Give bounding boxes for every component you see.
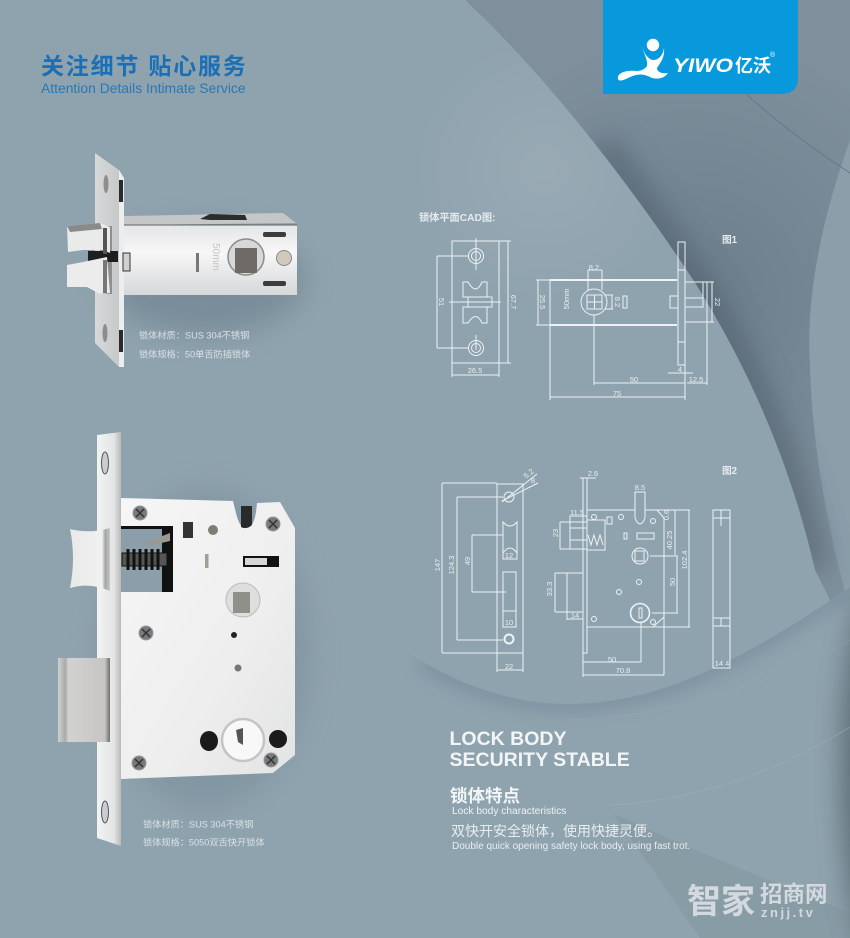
cad drawing 2: mechanism view bbox=[545, 469, 690, 677]
cad drawing 1: side view: 50mm bbox=[562, 289, 571, 309]
feature description: 双快开安全锁体，使用快捷灵便。 bbox=[451, 823, 661, 839]
case bbox=[121, 498, 295, 779]
cad drawing 2: mechanism view: 50 bbox=[608, 655, 616, 664]
cad drawing 2: mechanism view: 102.4 bbox=[680, 551, 689, 569]
caption: small lock: 锁体规格：50单舌防插锁体 bbox=[139, 348, 250, 360]
feature subheading: Lock body characteristics bbox=[452, 806, 566, 817]
plate bbox=[95, 153, 124, 367]
spring window bbox=[121, 527, 173, 592]
cad drawing 1: front view: 51 bbox=[437, 298, 446, 306]
caption: large lock: 锁体规格：5050双舌快开锁体 bbox=[143, 836, 265, 848]
feature heading bbox=[450, 728, 630, 771]
cad drawing 2: mechanism view: 2.6 bbox=[588, 469, 598, 478]
cad drawing 1: side view: 8.2 bbox=[613, 297, 622, 307]
cad drawing 1: side view: 4 bbox=[678, 365, 682, 374]
cad drawing 1: side view bbox=[536, 242, 722, 400]
feature heading: LOCK BODY bbox=[450, 728, 566, 750]
feature description bbox=[451, 823, 690, 852]
small cut-outs bbox=[183, 522, 193, 538]
cad drawing 2: faceplate view: 10 bbox=[505, 618, 513, 627]
cad drawing 2: edge view bbox=[713, 510, 730, 668]
feature subheading bbox=[450, 786, 566, 817]
logo panel: ® bbox=[770, 51, 776, 59]
cad drawing 2: mechanism view: 70.8 bbox=[616, 666, 630, 675]
caption: small lock bbox=[139, 330, 250, 360]
cad drawing 2: faceplate view: 49 bbox=[463, 557, 472, 565]
caption: large lock bbox=[143, 818, 265, 848]
cylinder opening bbox=[222, 719, 264, 761]
cad drawing 2: mechanism view: 8.5 bbox=[635, 483, 645, 492]
watermark: 招商网 bbox=[760, 882, 828, 907]
cad drawing 1: side view: 8.2 bbox=[589, 263, 599, 272]
figure 2 label: 图2 bbox=[722, 465, 737, 477]
caption: large lock: 锁体材质：SUS 304不锈钢 bbox=[143, 818, 253, 830]
cad drawing 2: faceplate view: 5.2 bbox=[522, 467, 536, 480]
watermark: znjj.tv bbox=[761, 905, 815, 920]
product photo: mortise latch, small lock bbox=[67, 153, 297, 367]
cad drawing 2: faceplate view: 147 bbox=[433, 559, 442, 571]
cad drawing 2: edge view: 14.4 bbox=[715, 659, 729, 668]
cad drawing 1: side view: 22 bbox=[713, 298, 722, 306]
latches bbox=[100, 226, 112, 294]
cad drawing 2: mechanism view: 0.6 bbox=[662, 510, 671, 520]
product photo: mortise latch, small lock: 50mm bbox=[210, 243, 221, 271]
cad drawing 2: mechanism view: 23 bbox=[551, 529, 560, 537]
cad drawing 2: faceplate view: 22 bbox=[505, 662, 513, 671]
screws bbox=[132, 506, 280, 770]
product photo: mortise lock body, large lock bbox=[58, 432, 295, 846]
cad drawing 2: faceplate view: 124.3 bbox=[447, 556, 456, 574]
lock body bbox=[124, 213, 296, 225]
latch bolt bbox=[70, 528, 110, 591]
watermark bbox=[687, 882, 828, 921]
watermark: 智家 bbox=[687, 883, 755, 921]
figure 1 label: 图1 bbox=[722, 234, 738, 246]
cad drawing 2: faceplate view bbox=[433, 467, 538, 672]
cad drawing 2: faceplate view: 8 bbox=[531, 476, 535, 485]
cad drawing 2: mechanism view: 33.3 bbox=[545, 582, 554, 596]
cad drawing 1: front view: 67.7 bbox=[509, 295, 518, 309]
heading chinese: 关注细节 贴心服务 bbox=[41, 53, 248, 79]
feature heading: SECURITY STABLE bbox=[450, 749, 630, 771]
cad drawing 1: side view: 25.5 bbox=[538, 295, 547, 309]
cad drawing 2: mechanism view: 40.25 bbox=[665, 531, 674, 549]
cad drawing 2: mechanism view: 50 bbox=[668, 578, 677, 586]
faceplate bbox=[97, 432, 121, 846]
cad drawing 2: faceplate view: 12 bbox=[505, 551, 513, 560]
logo panel bbox=[603, 0, 798, 94]
cad drawing 1: side view: 12.5 bbox=[689, 375, 703, 384]
cad drawing 1: front view: 26.5 bbox=[468, 366, 482, 375]
feature subheading: 锁体特点 bbox=[450, 786, 520, 806]
cad drawing 1: side view: 75 bbox=[613, 389, 621, 398]
logo panel: 亿沃 bbox=[735, 56, 771, 76]
logo figure icon bbox=[618, 39, 668, 80]
cad drawing 1: side view: 50 bbox=[630, 375, 638, 384]
cad drawing 2: mechanism view: 14 bbox=[571, 611, 579, 620]
spindle bbox=[226, 583, 260, 617]
caption: small lock: 锁体材质：SUS 304不锈钢 bbox=[139, 330, 249, 340]
heading english: Attention Details Intimate Service bbox=[41, 80, 246, 96]
logo wordmark: YIWO bbox=[673, 56, 733, 77]
cad drawing 2: mechanism view: 11.5 bbox=[570, 508, 584, 517]
feature description: Double quick opening safety lock body, using fast trot. bbox=[452, 841, 690, 852]
dead bolt bbox=[58, 658, 110, 742]
cad heading: 锁体平面CAD图: bbox=[419, 211, 495, 224]
cad drawing 1: front view bbox=[437, 238, 518, 377]
